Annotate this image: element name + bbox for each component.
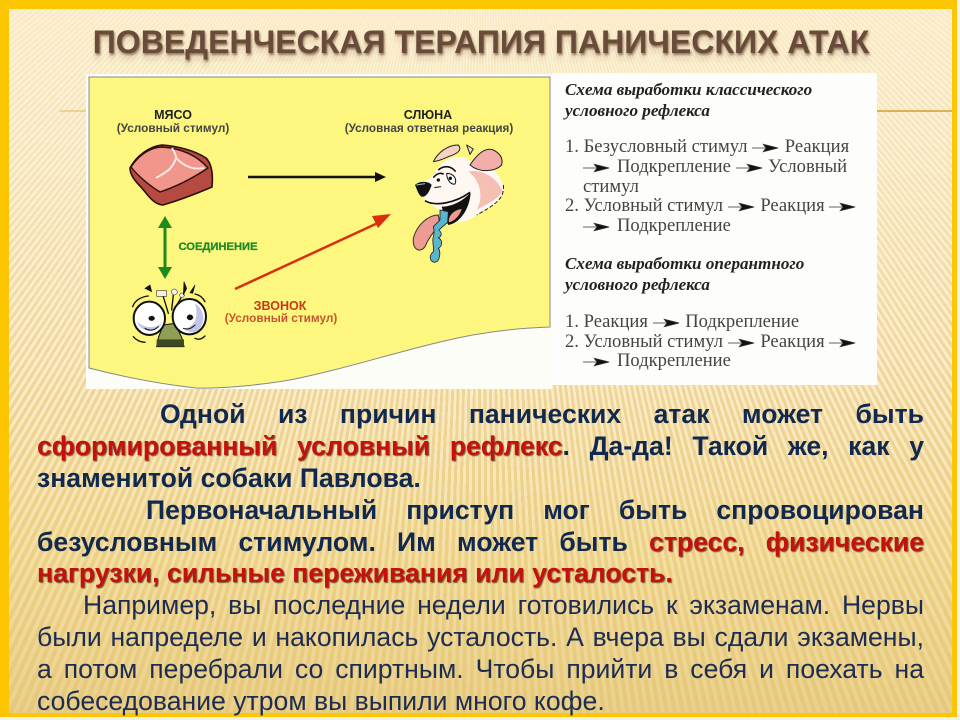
heading: classical reflex scheme: Схема выработки классического: [565, 80, 812, 99]
panel: reflex schemes: [552, 73, 877, 385]
arrow: meat to saliva: [248, 172, 386, 182]
label: meat: (Условный стимул): [117, 121, 229, 135]
text block: explanation: [37, 399, 925, 716]
label: bell: [225, 299, 337, 325]
label: meat: МЯСО: [154, 108, 192, 122]
heading: classical reflex scheme: [563, 80, 812, 120]
label: meat: [117, 108, 229, 135]
text block: explanation: Одной из причин панических атак может быть: [160, 399, 924, 429]
text block: explanation: сформированный условный рефлекс. Да-да! Такой же, как у: [37, 431, 924, 461]
label: bell: ЗВОНОК: [254, 299, 307, 313]
heading: operant reflex scheme: [563, 254, 804, 294]
list: classical reflex steps: 1. Безусловный стимул Реакция: [565, 136, 849, 157]
list: operant reflex steps: 2. Условный стимул Реакция: [565, 331, 825, 352]
label: saliva: СЛЮНА: [404, 108, 452, 122]
list: operant reflex steps: Подкрепление: [617, 350, 731, 371]
list: classical reflex steps: [565, 136, 856, 236]
label: bell: (Условный стимул): [225, 311, 337, 325]
heading: operant reflex scheme: условного рефлекса: [565, 274, 710, 294]
text block: explanation: нагрузки, сильные переживания или усталость.: [37, 558, 673, 588]
list: classical reflex steps: 2. Условный стимул Реакция: [565, 195, 825, 216]
list: operant reflex steps: 1. Реакция Подкрепление: [565, 311, 799, 332]
heading: classical reflex scheme: условного рефлекса: [565, 100, 710, 120]
list: classical reflex steps: Подкрепление: [617, 215, 731, 236]
icon: meat: [130, 145, 212, 205]
icon: dog: [413, 145, 504, 262]
label: connection: СОЕДИНЕНИЕ: [178, 241, 258, 253]
label: saliva: (Условная ответная реакция): [345, 122, 513, 135]
icon: startled face: [133, 282, 206, 347]
text block: explanation: были напределе и накопилась усталость. А вчера вы сдали экзамены,: [37, 622, 924, 652]
label: saliva: [345, 108, 513, 135]
arrow: connection: [158, 216, 172, 279]
text block: explanation: Первоначальный приступ мог быть спровоцирован: [146, 495, 924, 525]
list: classical reflex steps: стимул: [583, 176, 639, 197]
list: operant reflex steps: [565, 311, 856, 371]
panel: Pavlov conditioning diagram: [86, 74, 552, 389]
text block: explanation: безусловным стимулом. Им может быть стресс, физические: [37, 527, 924, 557]
list: classical reflex steps: Подкрепление Условный: [617, 156, 847, 177]
title: ПОВЕДЕНЧЕСКАЯ ТЕРАПИЯ ПАНИЧЕСКИХ АТАК: [93, 24, 869, 60]
heading: operant reflex scheme: Схема выработки оперантного: [565, 254, 804, 273]
text block: explanation: Например, вы последние недели готовились к экзаменам. Нервы: [83, 590, 924, 620]
text block: explanation: а потом перебрали со спиртным. Чтобы прийти в себя и поехать на: [37, 654, 924, 684]
arrow: bell to saliva: [235, 214, 391, 289]
text block: explanation: знаменитой собаки Павлова.: [37, 463, 421, 493]
text block: explanation: собеседование утром вы выпили много кофе.: [37, 686, 605, 716]
